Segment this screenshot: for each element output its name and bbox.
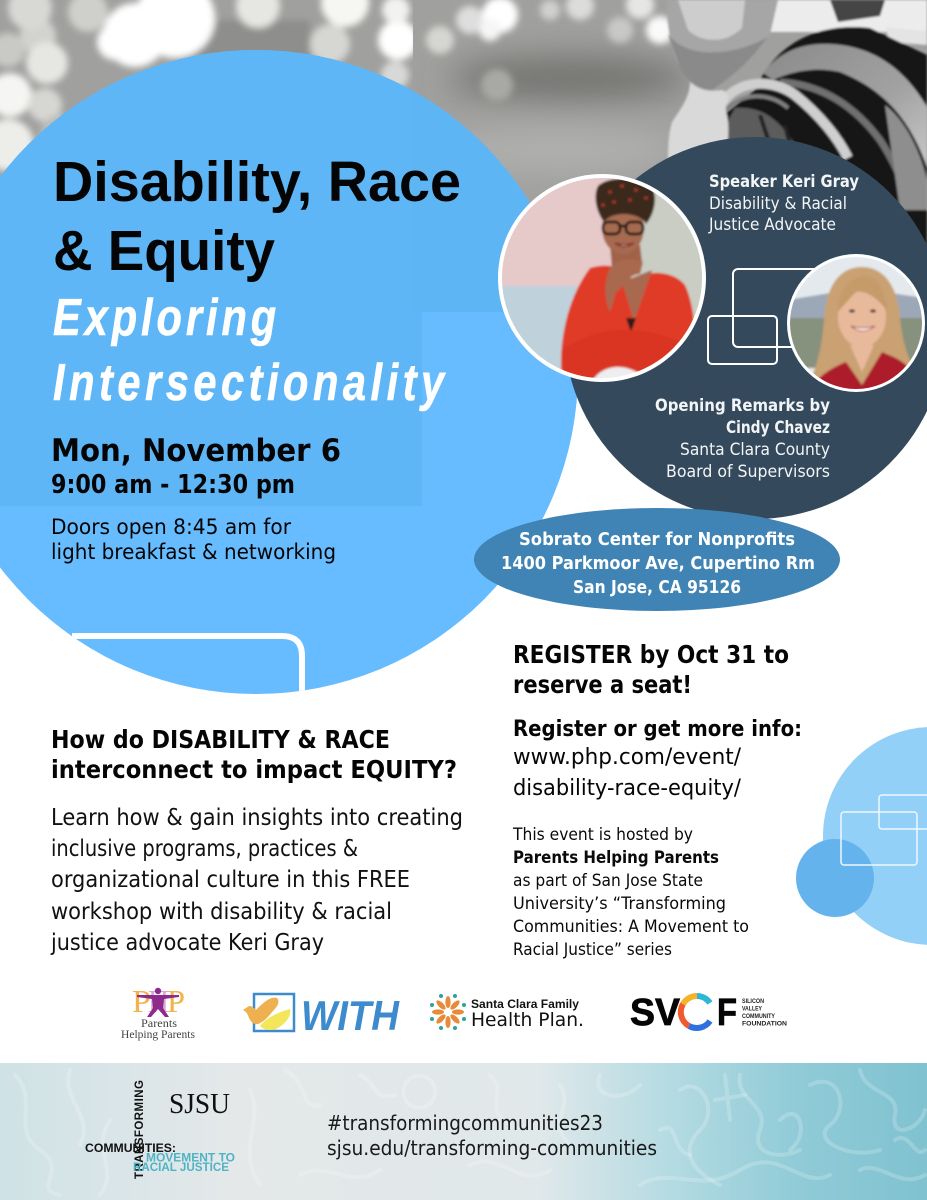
- logo: SVCF: VALLEY: [742, 1006, 762, 1012]
- question heading: [51, 725, 457, 784]
- question heading: How do DISABILITY & RACE: [51, 725, 390, 754]
- location oval: San Jose, CA 95126: [573, 577, 741, 598]
- logo: SVCF: SV: [630, 992, 681, 1034]
- speaker text: Cindy Chavez: Cindy Chavez: [726, 418, 830, 438]
- logo: Parents Helping Parents: Helping Parents: [121, 1027, 195, 1041]
- location oval: 1400 Parkmoor Ave, Cupertino Rm: [501, 553, 815, 574]
- logo: Santa Clara Family Health Plan: Health Plan.: [471, 1009, 584, 1031]
- description text: justice advocate Keri Gray: [50, 930, 324, 956]
- speaker text: Keri Gray: Speaker Keri Gray: [709, 172, 859, 192]
- date and time: Mon, November 6: [51, 433, 341, 469]
- logo: SVCF: SILICON: [742, 999, 764, 1005]
- footer logo: Transforming Communities: MOVEMENT TO: [146, 1150, 235, 1164]
- title: [53, 150, 461, 283]
- description text: Learn how & gain insights into creating: [51, 805, 463, 831]
- speaker text: Keri Gray: Justice Advocate: [708, 215, 836, 235]
- photo: Keri Gray: [498, 174, 706, 386]
- title: Disability, Race: [53, 150, 461, 214]
- head wrap: [596, 178, 655, 224]
- speaker text: Cindy Chavez: Opening Remarks by: [655, 396, 830, 416]
- logo: WITH: WITH: [301, 992, 401, 1039]
- registration text: Register or get more info:: [513, 716, 802, 742]
- footer band: [0, 1063, 927, 1200]
- host text: This event is hosted by: [512, 825, 693, 844]
- logo: Parents Helping Parents: H: [148, 983, 169, 1019]
- footer links: #transformingcommunities23: [327, 1111, 603, 1135]
- registration text: [513, 640, 802, 801]
- footer logo: Transforming Communities: COMMUNITIES:: [85, 1143, 176, 1155]
- registration text: disability-race-equity/: [513, 775, 741, 801]
- speaker text: Cindy Chavez: [655, 396, 830, 482]
- footer links: sjsu.edu/transforming-communities: [327, 1136, 657, 1160]
- bokeh middle section: [426, 0, 690, 172]
- date and time: Doors open 8:45 am for: [51, 515, 291, 539]
- sleeve and hand: [666, 0, 778, 52]
- description text: inclusive programs, practices &: [51, 836, 358, 862]
- crossed arms: [630, 330, 632, 332]
- description text: [50, 805, 463, 956]
- speaker text: Cindy Chavez: Santa Clara County: [680, 440, 830, 460]
- logo: Parents Helping Parents: Parents: [141, 1016, 177, 1030]
- wheel: [666, 0, 927, 245]
- logo: SVCF: COMMUNITY: [742, 1014, 775, 1020]
- logo: Santa Clara Family Health Plan: Santa Clara Family: [471, 997, 579, 1011]
- description text: workshop with disability & racial: [51, 899, 392, 925]
- logo: SVCF: [630, 992, 787, 1034]
- hand: [606, 260, 643, 312]
- logo: SVCF: FOUNDATION: [742, 1022, 787, 1028]
- subtitle: [53, 288, 447, 411]
- location oval: Sobrato Center for Nonprofits: [519, 529, 795, 550]
- bokeh left half: [0, 0, 418, 171]
- title: & Equity: [53, 219, 275, 283]
- host text: Parents Helping Parents: [513, 848, 719, 867]
- registration text: reserve a seat!: [513, 670, 692, 699]
- neck: [609, 244, 643, 267]
- logo: Parents Helping Parents: [121, 983, 195, 1041]
- logo: Santa Clara Family Health Plan: [430, 994, 584, 1031]
- photo: Cindy Chavez: [787, 254, 925, 396]
- date and time: light breakfast & networking: [51, 540, 336, 564]
- footer links: [327, 1111, 657, 1160]
- host text: Communities: A Movement to: [513, 917, 749, 936]
- panel: speakers dark circle: [564, 137, 927, 519]
- date and time: 9:00 am - 12:30 pm: [51, 470, 295, 500]
- white outline accent in big circle: [72, 636, 302, 696]
- big blue circle: [0, 50, 593, 700]
- registration text: REGISTER by Oct 31 to: [513, 640, 789, 669]
- date and time: [51, 433, 341, 564]
- question heading: interconnect to impact EQUITY?: [51, 755, 457, 784]
- footer squiggle pattern: [15, 1070, 925, 1195]
- decorative right circles: [796, 727, 927, 945]
- speaker text: Keri Gray: Disability & Racial: [709, 194, 847, 214]
- blouse: [561, 266, 695, 382]
- speaker text: Cindy Chavez: Board of Supervisors: [666, 462, 830, 482]
- subtitle: Intersectionality: [53, 353, 447, 411]
- outline rectangles: [708, 269, 843, 364]
- logo: Parents Helping Parents: P: [167, 983, 185, 1019]
- logo: WITH: [243, 992, 401, 1039]
- speaker text: Keri Gray: [708, 172, 859, 235]
- logo: Parents Helping Parents: P: [132, 983, 151, 1019]
- footer logo: Transforming Communities: RACIAL JUSTICE: [133, 1160, 229, 1174]
- background photo: bokeh and wheelchair: [0, 0, 927, 245]
- footer logo: Transforming Communities: TRANSFORMING: [134, 1080, 146, 1179]
- host text: Racial Justice” series: [513, 940, 672, 959]
- subtitle: Exploring: [53, 288, 276, 346]
- host text: [512, 825, 749, 959]
- host text: University’s “Transforming: [513, 894, 726, 913]
- footer logo: SJSU: SJSU: [169, 1088, 230, 1120]
- face: [601, 212, 645, 250]
- location oval: [474, 508, 840, 611]
- description text: organizational culture in this FREE: [51, 867, 410, 893]
- logo: SVCF: F: [717, 992, 737, 1034]
- footer logo: Transforming Communities: [85, 1080, 235, 1179]
- registration text: www.php.com/event/: [513, 744, 741, 770]
- host text: as part of San Jose State: [513, 871, 703, 890]
